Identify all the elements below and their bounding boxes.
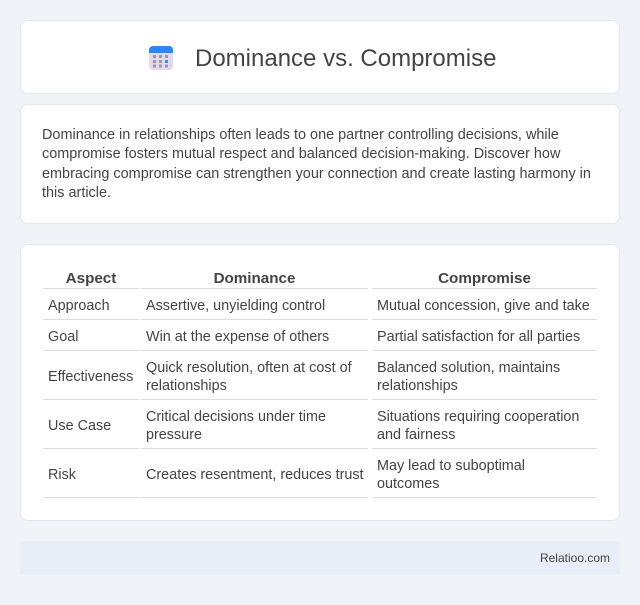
row: approach: Mutual concession, give and take bbox=[377, 298, 590, 314]
row: risk: outcomes bbox=[377, 476, 439, 492]
title: Dominance vs. Compromise bbox=[195, 45, 496, 72]
intro text: Dominance in relationships often leads to one partner controlling decisions, while bbox=[42, 127, 559, 143]
icon: calendar bbox=[149, 46, 173, 70]
row: use case bbox=[48, 409, 579, 443]
footer text: Relatioo.com bbox=[540, 551, 610, 565]
row: use case: Situations requiring cooperation bbox=[377, 409, 579, 425]
row: effectiveness: relationships bbox=[146, 378, 227, 394]
row: goal bbox=[48, 329, 580, 345]
row: risk: Risk bbox=[48, 467, 76, 483]
panel: introduction bbox=[20, 104, 620, 224]
row: risk: May lead to suboptimal bbox=[377, 458, 525, 474]
row: use case: pressure bbox=[146, 427, 202, 443]
row: approach bbox=[48, 298, 590, 314]
table header: Aspect bbox=[66, 270, 116, 287]
row: use case: and fairness bbox=[377, 427, 455, 443]
panel: title card bbox=[20, 20, 620, 94]
row: effectiveness: Effectiveness bbox=[48, 369, 133, 385]
intro text bbox=[42, 127, 591, 201]
row: goal: Win at the expense of others bbox=[146, 329, 329, 345]
row: effectiveness: Quick resolution, often at cost of bbox=[146, 360, 352, 376]
row: risk bbox=[48, 458, 525, 492]
row: effectiveness bbox=[48, 360, 560, 394]
intro text: embracing compromise can strengthen your connection and create lasting harmony in bbox=[42, 166, 591, 182]
row: risk: Creates resentment, reduces trust bbox=[146, 467, 364, 483]
intro text: this article. bbox=[42, 185, 111, 201]
row: effectiveness: relationships bbox=[377, 378, 458, 394]
row: goal: Partial satisfaction for all parties bbox=[377, 329, 580, 345]
table header: Compromise bbox=[438, 270, 531, 287]
panel: comparison table bbox=[20, 244, 620, 521]
row: approach: Assertive, unyielding control bbox=[146, 298, 325, 314]
row: use case: Critical decisions under time bbox=[146, 409, 326, 425]
table header: Dominance bbox=[214, 270, 295, 287]
row: use case: Use Case bbox=[48, 418, 111, 434]
row: approach: Approach bbox=[48, 298, 110, 314]
row: effectiveness: Balanced solution, maintains bbox=[377, 360, 560, 376]
footer bar bbox=[20, 541, 620, 575]
row: goal: Goal bbox=[48, 329, 78, 345]
intro text: compromise fosters mutual respect and balanced decision-making. Discover how bbox=[42, 146, 560, 162]
table header bbox=[66, 270, 531, 287]
